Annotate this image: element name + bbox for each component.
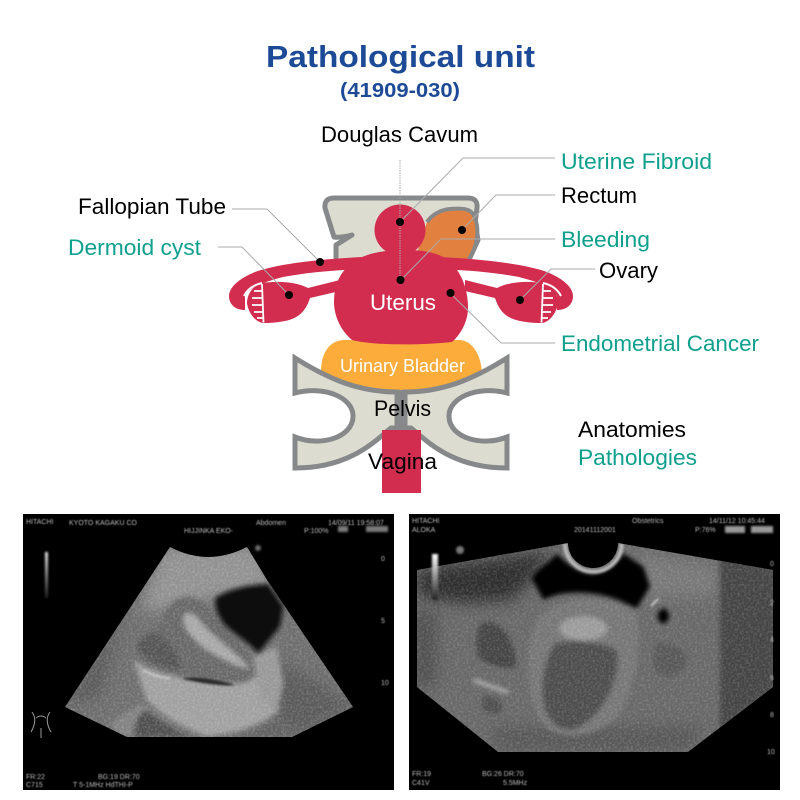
machine text: Abdomen <box>256 520 286 527</box>
machine text: 10 <box>381 680 389 687</box>
orange outline <box>427 209 477 262</box>
vagina <box>382 430 421 493</box>
ultrasound image left <box>23 514 394 790</box>
orange bleeding area <box>418 209 477 262</box>
diagram labels <box>68 122 759 474</box>
machine text: FR:22 <box>26 774 45 781</box>
diagram labels: Endometrial Cancer <box>561 331 759 356</box>
diagram labels: Pelvis <box>374 396 431 421</box>
diagram labels: Fallopian Tube <box>78 194 226 219</box>
uterus body <box>334 250 468 344</box>
machine text: 5 <box>381 618 385 625</box>
machine text: FR:19 <box>412 771 431 778</box>
machine text: 0 <box>770 561 774 568</box>
ultrasound sector and anatomy <box>410 540 780 755</box>
gain bar, probe mark and status boxes <box>432 526 773 600</box>
legend <box>578 417 697 470</box>
machine text: ALOKA <box>412 527 436 534</box>
machine text: 10 <box>767 749 775 756</box>
urinary bladder <box>321 340 482 400</box>
ultrasound image right <box>409 514 780 790</box>
machine text: BG:19 DR:70 <box>98 774 140 781</box>
legend: Anatomies <box>578 417 686 442</box>
uterus fundus <box>374 204 426 256</box>
diagram labels: Vagina <box>368 449 438 474</box>
machine text: KYOTO KAGAKU CO <box>69 520 137 527</box>
machine text: 8 <box>770 712 774 719</box>
rectum backing shape <box>325 198 478 262</box>
diagram labels: Douglas Cavum <box>321 122 478 147</box>
diagram labels: Uterus <box>370 290 436 315</box>
machine text: HIJJINKA EKO- <box>184 528 234 535</box>
machine text: T 5-1MHz HdTHI-P <box>73 782 133 789</box>
left fallopian tube and ovary <box>229 257 362 323</box>
title: Pathological unit <box>266 39 535 74</box>
title <box>266 39 535 102</box>
marker dots <box>285 218 524 304</box>
machine text: HITACHI <box>412 518 440 525</box>
subtitle: unit code: (41909-030) <box>340 80 460 102</box>
machine text: 2 <box>770 600 774 607</box>
machine text: 4 <box>770 637 774 644</box>
machine text: 0 <box>381 556 385 563</box>
machine text: 14/11/12 10:45:44 <box>709 518 765 525</box>
machine text: P:100% <box>304 528 329 535</box>
right ovary <box>465 280 561 323</box>
machine text: P:76% <box>695 527 716 534</box>
diagram labels: Rectum <box>561 183 637 208</box>
ultrasound sector and anatomy <box>60 540 360 740</box>
pelvis central column <box>395 390 407 430</box>
diagram labels: Uterine Fibroid <box>561 149 712 174</box>
legend: Pathologies <box>578 445 697 470</box>
body marker icon <box>31 712 51 738</box>
machine text: Obstetrics <box>632 518 664 525</box>
machine text: 6 <box>770 675 774 682</box>
machine text: HITACHI <box>26 519 54 526</box>
pelvis right half <box>405 358 507 468</box>
machine text: 14/09/11 19:58:07 <box>328 520 384 527</box>
pelvis left half <box>295 358 397 468</box>
machine text <box>26 519 389 789</box>
machine text: 5.5MHz <box>503 780 528 787</box>
machine text <box>412 518 775 787</box>
anatomy diagram <box>229 198 573 493</box>
diagram labels: Ovary <box>599 258 658 283</box>
diagram labels: Bleeding <box>561 227 650 252</box>
leader lines <box>218 158 595 343</box>
gain bar, probe mark and status boxes <box>45 526 388 598</box>
diagram labels: Urinary Bladder <box>340 356 465 376</box>
machine text: C41V <box>412 780 430 787</box>
machine text: 20141112001 <box>574 527 616 534</box>
right fallopian tube <box>440 257 573 310</box>
machine text: BG:26 DR:70 <box>482 771 524 778</box>
machine text: C715 <box>26 782 43 789</box>
diagram labels: Dermoid cyst <box>68 235 201 260</box>
